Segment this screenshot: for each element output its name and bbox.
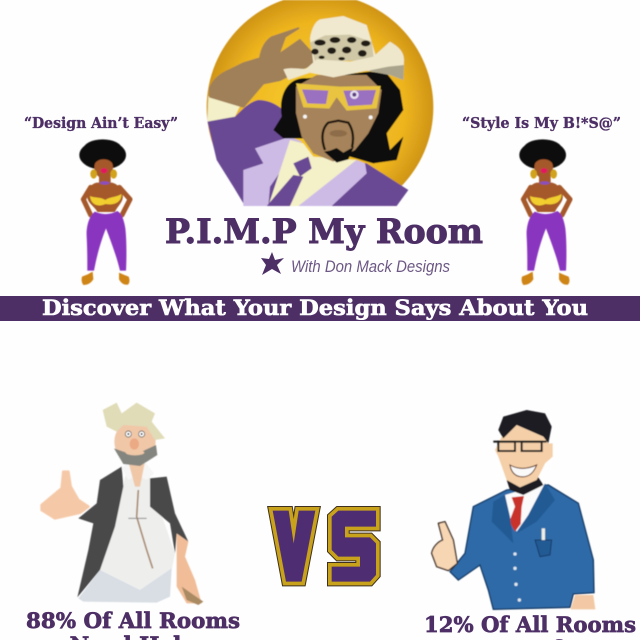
stat: 12 percent: 12% Of All Rooms — [424, 613, 636, 638]
subtitle: With Don Mack Designs — [291, 257, 450, 276]
figure: left woman — [79, 139, 130, 285]
figure: right woman — [519, 139, 570, 285]
quote: left: “Design Ain’t Easy” — [24, 115, 178, 132]
icon: star — [261, 252, 284, 275]
figure: businessman — [432, 410, 595, 609]
banner: Discover What Your Design Says About You — [42, 295, 588, 320]
title: P.I.M.P My Room — [165, 212, 483, 252]
figure: scruffy man — [42, 403, 203, 605]
VS lettering — [273, 511, 376, 582]
stat: 88 percent: 88% Of All Rooms — [26, 609, 240, 634]
quote: right: “Style Is My B!*S@” — [462, 115, 621, 132]
illustration: pimp portrait in gold circle — [207, 0, 433, 221]
